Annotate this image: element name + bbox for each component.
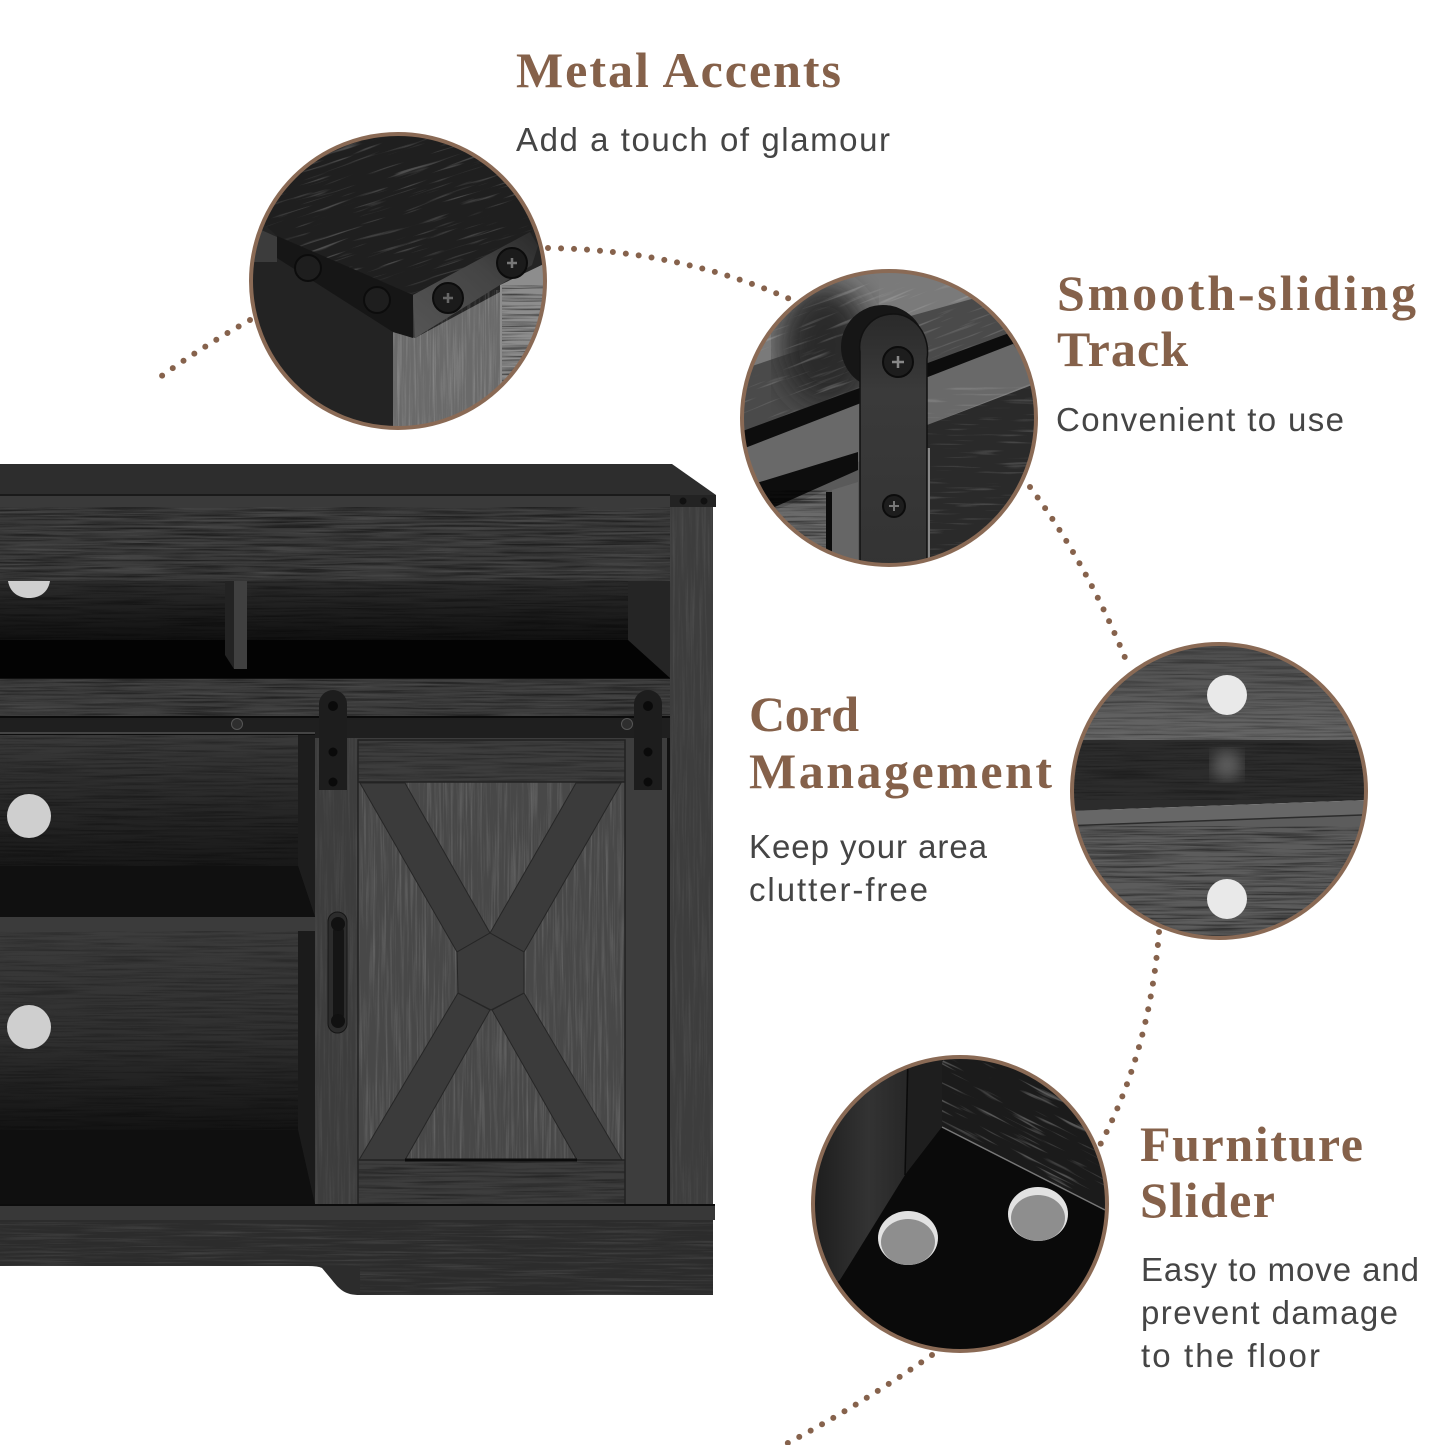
heading: Smooth-sliding Track bbox=[1057, 265, 1416, 377]
text: slider subtitle bbox=[1141, 1251, 1419, 1374]
lower compartment bbox=[0, 734, 315, 1205]
cable hole bbox=[1207, 675, 1247, 715]
sliding track bbox=[0, 716, 670, 738]
detail circle: furniture slider bbox=[811, 1055, 1109, 1353]
base bbox=[0, 1220, 713, 1295]
lower fascia bbox=[0, 679, 670, 717]
heading: Smooth-sliding Track: Smooth-sliding bbox=[1057, 265, 1416, 321]
heading: Furniture Slider: Slider bbox=[1140, 1172, 1275, 1228]
cable hole middle bbox=[7, 794, 51, 838]
heading: Metal Accents: Metal Accents bbox=[516, 42, 841, 98]
cabinet top surface bbox=[0, 464, 716, 507]
divider bbox=[225, 581, 247, 669]
detail circle: metal accents bbox=[249, 132, 547, 430]
door hanger left bbox=[319, 690, 347, 790]
leg front face bbox=[393, 292, 500, 430]
heading: Furniture Slider bbox=[1140, 1116, 1363, 1228]
top wood surface bbox=[404, 290, 420, 295]
cable hole bbox=[1207, 879, 1247, 919]
lower light band bbox=[747, 344, 1030, 482]
heading: Cord Management: Management bbox=[749, 743, 1052, 799]
strap bbox=[860, 314, 928, 570]
dotted connector arc bbox=[156, 248, 1159, 1444]
cabinet front lip bbox=[0, 494, 716, 507]
upper left side bbox=[254, 230, 277, 262]
right side post bbox=[667, 507, 713, 1205]
text: slider subtitle: to the floor bbox=[1141, 1337, 1320, 1374]
heading: Cord Management: Cord bbox=[749, 686, 859, 742]
slider pad bbox=[878, 1211, 938, 1265]
product: TV cabinet bbox=[0, 464, 716, 1295]
bottom wood bbox=[777, 490, 828, 548]
cabinet backing bbox=[0, 495, 713, 1220]
text: slider subtitle: Easy to move and bbox=[1141, 1251, 1419, 1288]
left leg face bbox=[250, 250, 393, 430]
door frame lines bbox=[358, 740, 625, 1205]
text: cord subtitle: clutter-free bbox=[749, 871, 928, 908]
heading: Smooth-sliding Track: Track bbox=[1057, 321, 1188, 377]
text: cord subtitle bbox=[749, 828, 988, 908]
door X brace bbox=[359, 783, 622, 1160]
leg side planks bbox=[500, 264, 543, 384]
slider pad bbox=[1008, 1187, 1068, 1241]
right dark panel bbox=[928, 386, 1034, 557]
text: cord subtitle: Keep your area bbox=[749, 828, 988, 865]
plinth trim bbox=[0, 1204, 715, 1220]
black rail lower bbox=[759, 452, 858, 507]
heading: Furniture Slider: Furniture bbox=[1140, 1116, 1363, 1172]
cable hole lower bbox=[7, 1005, 51, 1049]
text: track subtitle: Convenient to use bbox=[1056, 401, 1344, 438]
text: metal accents subtitle: Add a touch of glamour bbox=[516, 121, 890, 158]
detail circle: sliding track bbox=[740, 269, 1038, 567]
open upper compartment bbox=[0, 581, 670, 678]
black rail upper bbox=[740, 332, 1018, 448]
sliding barn door bbox=[315, 738, 667, 1205]
door handle bbox=[328, 912, 347, 1033]
text: slider subtitle: prevent damage bbox=[1141, 1294, 1398, 1331]
heading: Cord Management bbox=[749, 686, 1052, 799]
detail circle: cord management bbox=[1070, 643, 1368, 940]
door hanger right bbox=[634, 690, 662, 790]
cable hole top bbox=[8, 581, 50, 598]
upper fascia bbox=[0, 507, 670, 581]
hole reflection bbox=[1212, 750, 1242, 780]
roller bbox=[841, 305, 920, 382]
